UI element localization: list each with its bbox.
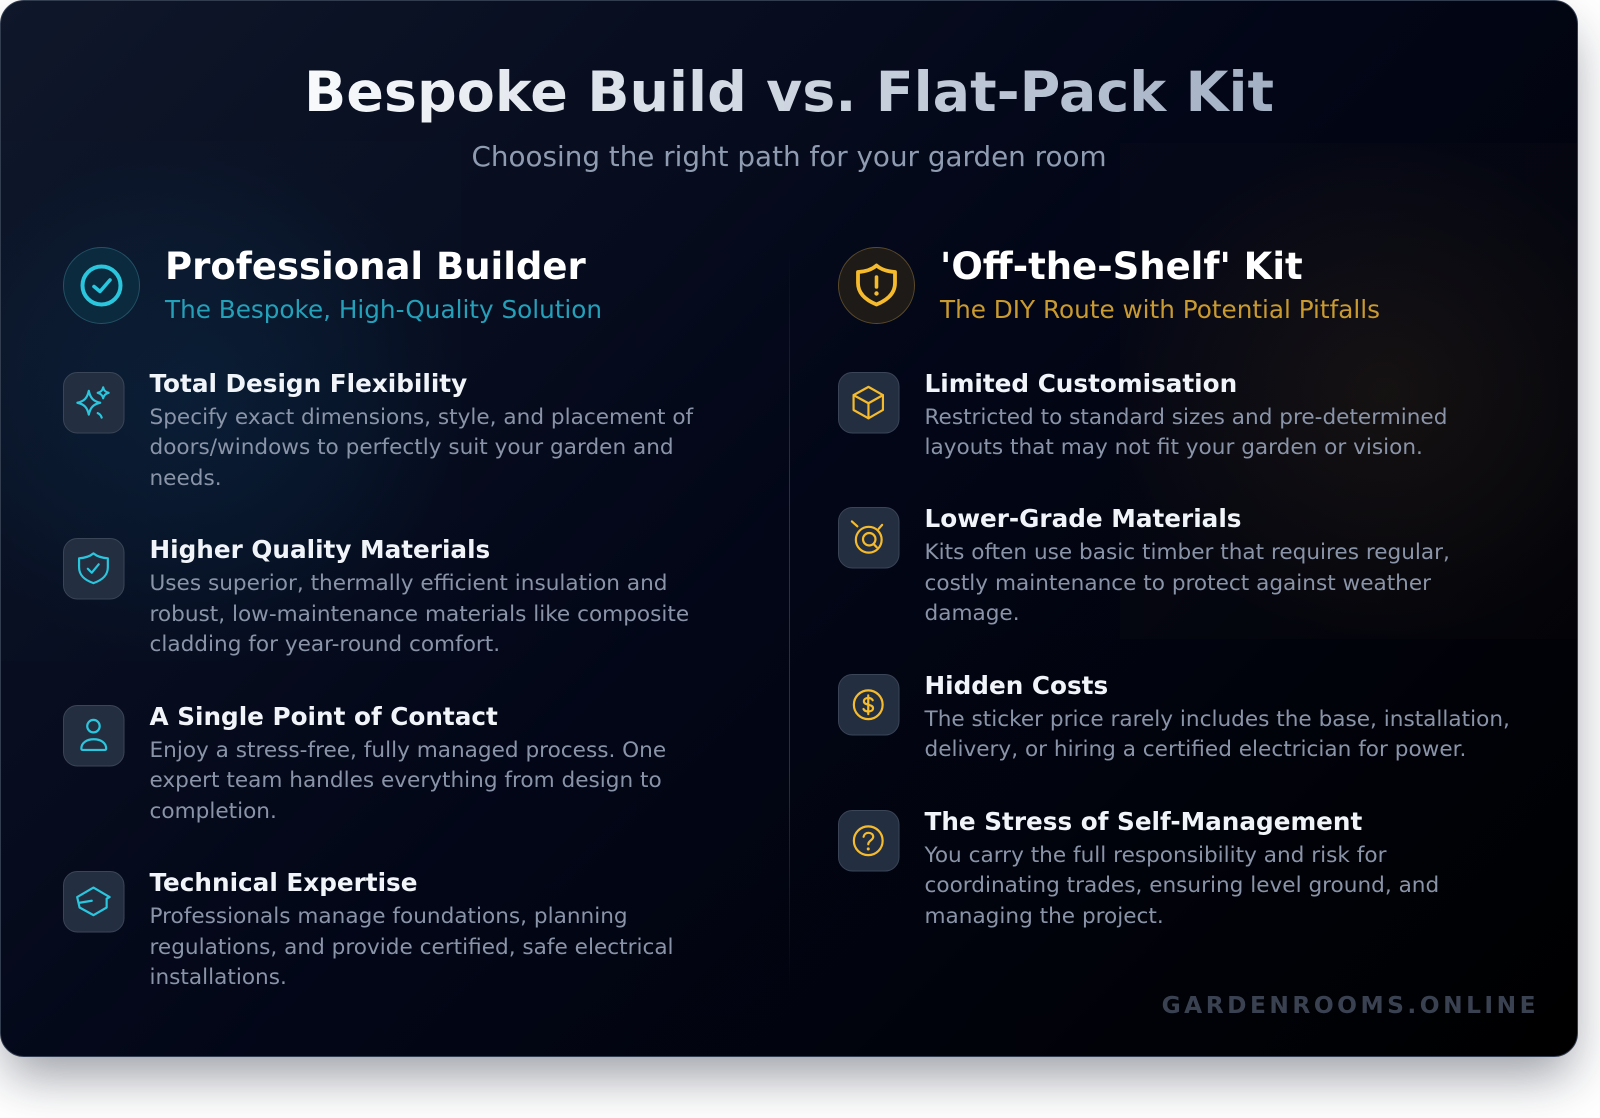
icon: check circle bbox=[63, 247, 140, 324]
item: higher quality materials bbox=[63, 535, 689, 657]
item text: installations. bbox=[150, 965, 287, 990]
icon: target bbox=[838, 507, 900, 568]
item heading: Hidden Costs bbox=[924, 670, 1108, 700]
subheading: off the shelf kit: The DIY Route with Potential Pitfalls bbox=[940, 294, 1380, 324]
icon: person bbox=[63, 705, 124, 766]
item text: You carry the full responsibility and risk for bbox=[924, 842, 1386, 868]
item text: damage. bbox=[924, 601, 1020, 626]
icon: graduation cap bbox=[63, 871, 124, 932]
item heading: Lower-Grade Materials bbox=[924, 504, 1242, 533]
item text: Kits often use basic timber that requires regular, bbox=[924, 540, 1450, 565]
item: limited customisation bbox=[838, 368, 1447, 460]
footer brand: GARDENROOMS.ONLINE bbox=[1162, 992, 1539, 1019]
subheading: professional builder: The Bespoke, High-Quality Solution bbox=[165, 294, 602, 324]
item text: layouts that may not fit your garden or vision. bbox=[924, 435, 1423, 460]
item: lower grade materials bbox=[838, 504, 1450, 626]
icon: shield check bbox=[63, 538, 124, 600]
item text: expert team handles everything from design to bbox=[150, 768, 662, 793]
icon: question bbox=[838, 810, 900, 872]
item heading: The Stress of Self-Management bbox=[924, 806, 1362, 836]
item heading: Limited Customisation bbox=[924, 368, 1237, 398]
subtitle: Choosing the right path for your garden room bbox=[471, 140, 1107, 173]
item: stress of self-management bbox=[838, 806, 1439, 929]
item text bbox=[150, 404, 694, 491]
item text bbox=[150, 738, 666, 824]
item text: cladding for year-round comfort. bbox=[150, 632, 500, 657]
item heading: Total Design Flexibility bbox=[150, 368, 467, 398]
item text: needs. bbox=[150, 466, 222, 491]
item text: coordinating trades, ensuring level ground, and bbox=[924, 873, 1439, 898]
item text: delivery, or hiring a certified electrician for power. bbox=[924, 737, 1466, 762]
item text: Specify exact dimensions, style, and placement of bbox=[150, 404, 693, 430]
item text bbox=[150, 571, 689, 657]
title: Bespoke Build vs. Flat-Pack Kit bbox=[304, 60, 1274, 125]
item text: doors/windows to perfectly suit your garden and bbox=[150, 435, 674, 460]
item text: robust, low-maintenance materials like composite bbox=[150, 602, 689, 627]
item text: costly maintenance to protect against weather bbox=[924, 571, 1431, 596]
heading: professional builder: Professional Builder bbox=[165, 245, 586, 288]
item text bbox=[924, 842, 1439, 929]
item heading: A Single Point of Contact bbox=[150, 702, 498, 730]
item text: Restricted to standard sizes and pre-determined bbox=[924, 404, 1447, 430]
item text: regulations, and provide certified, safe electrical bbox=[150, 935, 674, 960]
item text: Uses superior, thermally efficient insulation and bbox=[150, 571, 667, 596]
item text bbox=[924, 706, 1510, 762]
item heading: Technical Expertise bbox=[150, 868, 417, 897]
item: single point of contact bbox=[63, 702, 666, 824]
item text bbox=[924, 540, 1450, 626]
item: total design flexibility bbox=[63, 368, 694, 491]
item text: managing the project. bbox=[924, 904, 1164, 929]
item text: Enjoy a stress-free, fully managed process. One bbox=[150, 738, 666, 762]
item text bbox=[150, 904, 674, 990]
icon: sparkles bbox=[63, 372, 124, 434]
item text: completion. bbox=[150, 799, 277, 824]
icon: shield alert bbox=[838, 247, 915, 324]
item text: The sticker price rarely includes the base, installation, bbox=[924, 706, 1510, 732]
heading: off the shelf kit: 'Off-the-Shelf' Kit bbox=[940, 245, 1303, 288]
item text: Professionals manage foundations, planning bbox=[150, 904, 628, 929]
item heading: Higher Quality Materials bbox=[150, 535, 490, 564]
icon: dollar bbox=[838, 674, 900, 736]
item: technical expertise bbox=[63, 868, 674, 990]
icon: cube bbox=[838, 372, 900, 434]
item: hidden costs bbox=[838, 670, 1510, 762]
item text bbox=[924, 404, 1447, 460]
